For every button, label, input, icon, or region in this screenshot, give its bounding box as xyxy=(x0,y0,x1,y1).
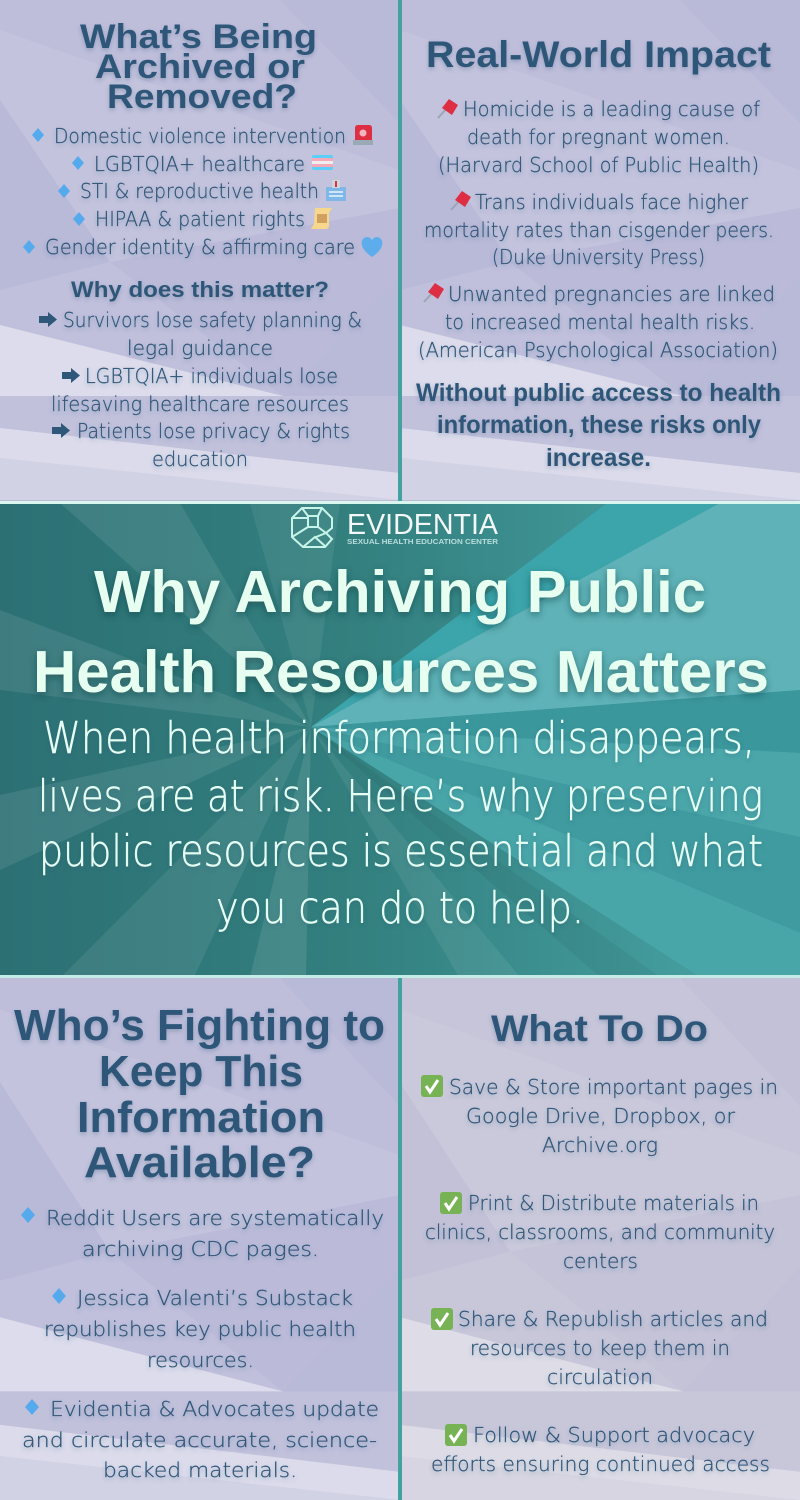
logo mark xyxy=(292,508,332,547)
panel background xyxy=(0,0,400,500)
panel: what to do xyxy=(400,978,800,1500)
subheading: why does this matter: Why does this matter? xyxy=(71,277,329,302)
why it matters list xyxy=(39,308,362,471)
main title xyxy=(33,559,769,705)
list text: STI & reproductive health xyxy=(80,179,319,203)
icons: blue diamonds xyxy=(21,1207,66,1415)
topic list xyxy=(23,124,382,259)
action text: Share & Republish articles and xyxy=(458,1307,768,1331)
icon: trans flag xyxy=(312,155,333,170)
advocates text: Jessica Valenti’s Substack xyxy=(77,1286,353,1310)
why it matters text xyxy=(51,308,362,471)
panel: what's being archived or removed xyxy=(0,0,400,500)
advocates text: republishes key public health xyxy=(44,1317,356,1341)
heading: real-world impact: Real-World Impact xyxy=(426,34,771,75)
advocates text: and circulate accurate, science- xyxy=(22,1428,377,1452)
heading: what's being archived: Archived or xyxy=(95,48,305,86)
heading: what's being archived: Removed? xyxy=(107,78,297,116)
closing statement: increase. xyxy=(546,444,651,472)
main title: Health Resources Matters xyxy=(33,639,769,705)
icon: pin xyxy=(424,283,444,302)
heading: who's fighting xyxy=(14,1001,385,1187)
panel background xyxy=(400,0,800,500)
panel: real-world impact xyxy=(400,0,800,500)
icon: check xyxy=(440,1192,462,1214)
fact text: (Duke University Press) xyxy=(492,245,705,269)
panel: hero xyxy=(0,503,800,977)
closing statement: Without public access to health xyxy=(416,379,781,407)
action text: Google Drive, Dropbox, or xyxy=(466,1104,736,1128)
action text: Save & Store important pages in xyxy=(449,1075,778,1099)
action text: efforts ensuring continued access xyxy=(431,1452,770,1476)
fact text xyxy=(418,97,778,362)
fact text: death for pregnant women. xyxy=(467,125,730,149)
fact text: (American Psychological Association) xyxy=(418,338,778,362)
why it matters text: education xyxy=(152,447,248,471)
panel background xyxy=(0,978,400,1500)
fact text: (Harvard School of Public Health) xyxy=(438,153,759,177)
heading: what's being archived xyxy=(80,18,317,116)
list text: Gender identity & affirming care xyxy=(45,235,355,259)
subtitle: you can do to help. xyxy=(216,883,584,934)
fact text: Homicide is a leading cause of xyxy=(463,97,761,121)
icon: heart xyxy=(362,237,382,257)
icon: siren xyxy=(353,125,373,145)
icon: hospital xyxy=(326,180,346,201)
action text: Archive.org xyxy=(542,1133,658,1157)
tagline: SEXUAL HEALTH EDUCATION CENTER xyxy=(347,539,498,546)
action text: circulation xyxy=(547,1365,653,1389)
fact text: mortality rates than cisgender peers. xyxy=(424,218,774,242)
action text xyxy=(425,1075,778,1476)
why it matters text: Patients lose privacy & rights xyxy=(77,419,350,443)
icon: check xyxy=(431,1308,453,1330)
advocates text: archiving CDC pages. xyxy=(82,1237,319,1261)
action text: Print & Distribute materials in xyxy=(468,1191,759,1215)
icon: pin xyxy=(438,99,458,118)
advocates text xyxy=(22,1206,384,1482)
icon: pin xyxy=(451,191,471,210)
wordmark: EVIDENTIA xyxy=(347,509,499,541)
heading: what to do: What To Do xyxy=(491,1008,708,1049)
heading: what's being archived: What’s Being xyxy=(80,18,317,56)
fact text: Trans individuals face higher xyxy=(475,190,749,214)
subtitle xyxy=(38,713,763,934)
hero background with rays xyxy=(0,503,800,977)
hero top border xyxy=(0,501,800,504)
action text: Follow & Support advocacy xyxy=(473,1423,755,1447)
why it matters text: Survivors lose safety planning & xyxy=(63,308,362,332)
fact text: to increased mental health risks. xyxy=(445,310,755,334)
advocates text: Evidentia & Advocates update xyxy=(50,1397,379,1421)
heading: who's fighting: Who’s Fighting to xyxy=(14,1001,385,1050)
column divider bottom xyxy=(398,977,402,1500)
column divider top xyxy=(398,0,402,502)
main title: Why Archiving Public xyxy=(94,559,706,625)
why it matters text: lifesaving healthcare resources xyxy=(51,392,349,416)
logo: evidentia xyxy=(292,508,499,547)
why it matters text: legal guidance xyxy=(127,336,273,360)
advocates text: resources. xyxy=(147,1348,254,1372)
icons: blue diamonds xyxy=(23,128,85,254)
panel background xyxy=(400,978,800,1500)
icon: check xyxy=(445,1424,467,1446)
advocates list xyxy=(21,1206,384,1482)
icon: check xyxy=(421,1075,443,1097)
impact facts xyxy=(418,97,778,362)
action text: clinics, classrooms, and community xyxy=(425,1220,775,1244)
heading: who's fighting: Information xyxy=(77,1093,325,1142)
list text: Domestic violence intervention xyxy=(54,124,346,148)
panel: who's fighting xyxy=(0,978,400,1500)
fact text: Unwanted pregnancies are linked xyxy=(448,282,775,306)
list text xyxy=(45,124,355,259)
advocates text: Reddit Users are systematically xyxy=(46,1206,384,1230)
heading: who's fighting: Available? xyxy=(84,1138,315,1187)
hero bottom border xyxy=(0,975,800,978)
action text: resources to keep them in xyxy=(470,1336,730,1360)
closing statement: information, these risks only xyxy=(437,411,761,439)
icons: arrows xyxy=(39,312,80,438)
action list xyxy=(421,1075,778,1476)
closing statement xyxy=(416,379,781,472)
heading: who's fighting: Keep This xyxy=(99,1047,303,1096)
advocates text: backed materials. xyxy=(103,1458,297,1482)
list text: LGBTQIA+ healthcare xyxy=(94,152,305,176)
why it matters text: LGBTQIA+ individuals lose xyxy=(85,364,338,388)
action text: centers xyxy=(563,1249,638,1273)
list text: HIPAA & patient rights xyxy=(95,207,305,231)
icon: scroll xyxy=(311,208,332,229)
